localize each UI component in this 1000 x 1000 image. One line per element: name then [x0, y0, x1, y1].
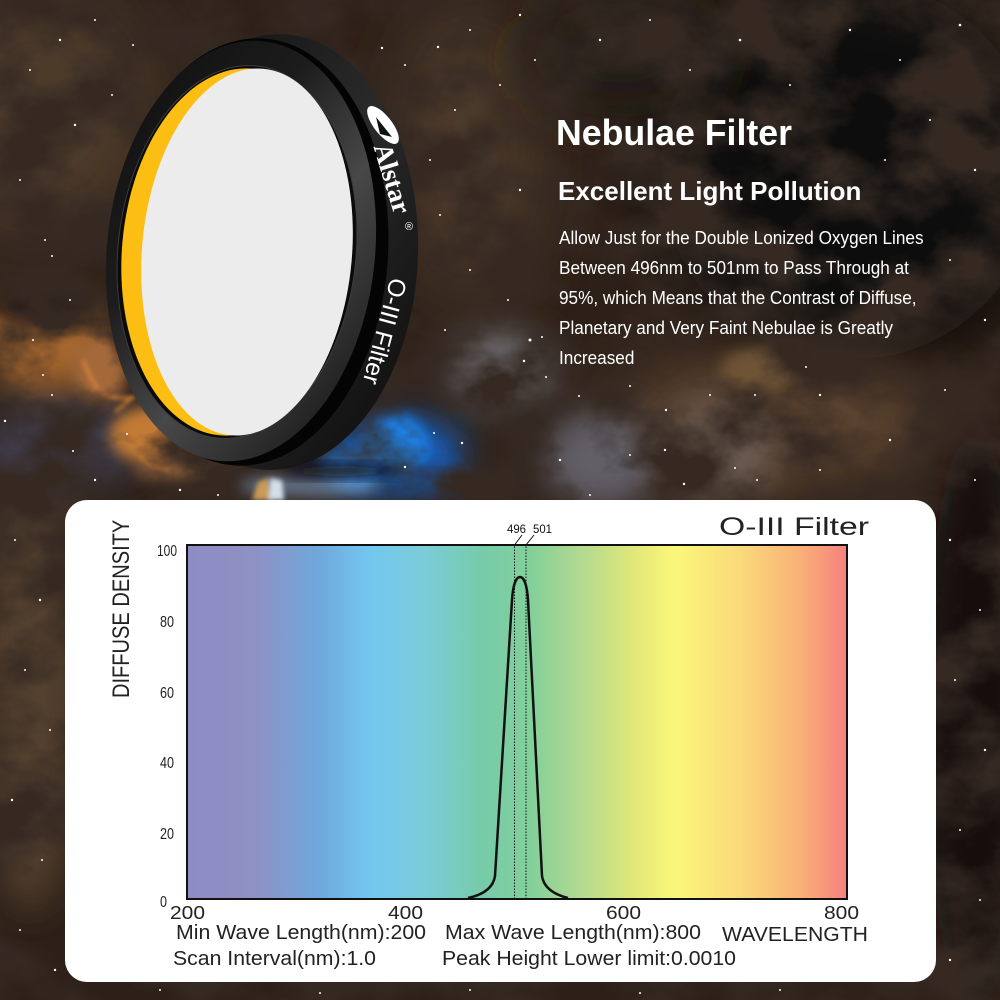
x axis ticks: 600 [606, 903, 641, 923]
brand mark: Alstar: ® [405, 221, 413, 233]
brand mark: Alstar: Alstar [368, 140, 417, 217]
peak labels: 496 [507, 522, 526, 536]
y axis ticks: 100 [157, 543, 177, 560]
y axis ticks: 60 [160, 685, 174, 702]
y axis ticks: 0 [160, 894, 167, 911]
y axis ticks: 80 [160, 614, 174, 631]
transmission peak curve [468, 577, 568, 898]
lens side rim [124, 29, 426, 475]
spectrum plot area [187, 545, 847, 899]
x axis ticks: 800 [824, 903, 859, 923]
description text: Between 496nm to 501nm to Pass Through at [559, 257, 909, 278]
panel: spectrum chart card [65, 500, 936, 982]
scan parameters: Max Wave Length(nm):800 [445, 921, 701, 944]
description text: 95%, which Means that the Contrast of Diffuse, [559, 287, 917, 308]
scan parameters: Peak Height Lower limit:0.0010 [442, 947, 736, 970]
subtitle: Excellent Light Pollution [558, 176, 861, 206]
chart: O-III transmission spectrum: 501 [533, 522, 552, 536]
496 and 501 marker lines [514, 535, 534, 899]
filter engraving: O-III Filter: O-III Filter [357, 275, 411, 387]
description text: Allow Just for the Double Lonized Oxygen Lines [559, 227, 924, 248]
x axis ticks: 200 [170, 903, 205, 923]
yellow coating crescent [106, 59, 366, 445]
description text [559, 227, 924, 368]
scan parameters: WAVELENGTH [722, 923, 868, 946]
title: Nebulae Filter [556, 113, 792, 153]
scan parameters: Scan Interval(nm):1.0 [173, 947, 376, 970]
lens front ring [86, 27, 396, 475]
description text: Increased [559, 347, 634, 368]
y axis ticks [157, 543, 177, 911]
description text: Planetary and Very Faint Nebulae is Greatly [559, 317, 893, 338]
y axis ticks: 40 [160, 755, 174, 772]
x axis ticks: 400 [388, 903, 423, 923]
scan parameters: Min Wave Length(nm):200 [176, 921, 426, 944]
brand mark: Alstar [367, 106, 417, 233]
x axis ticks [170, 903, 859, 923]
scan parameters [173, 921, 868, 970]
y axis ticks: 20 [160, 826, 174, 843]
lens white glass [126, 60, 368, 444]
chart heading: O-III Filter [719, 513, 869, 541]
y axis title: DIFFUSE DENSITY [107, 519, 134, 698]
